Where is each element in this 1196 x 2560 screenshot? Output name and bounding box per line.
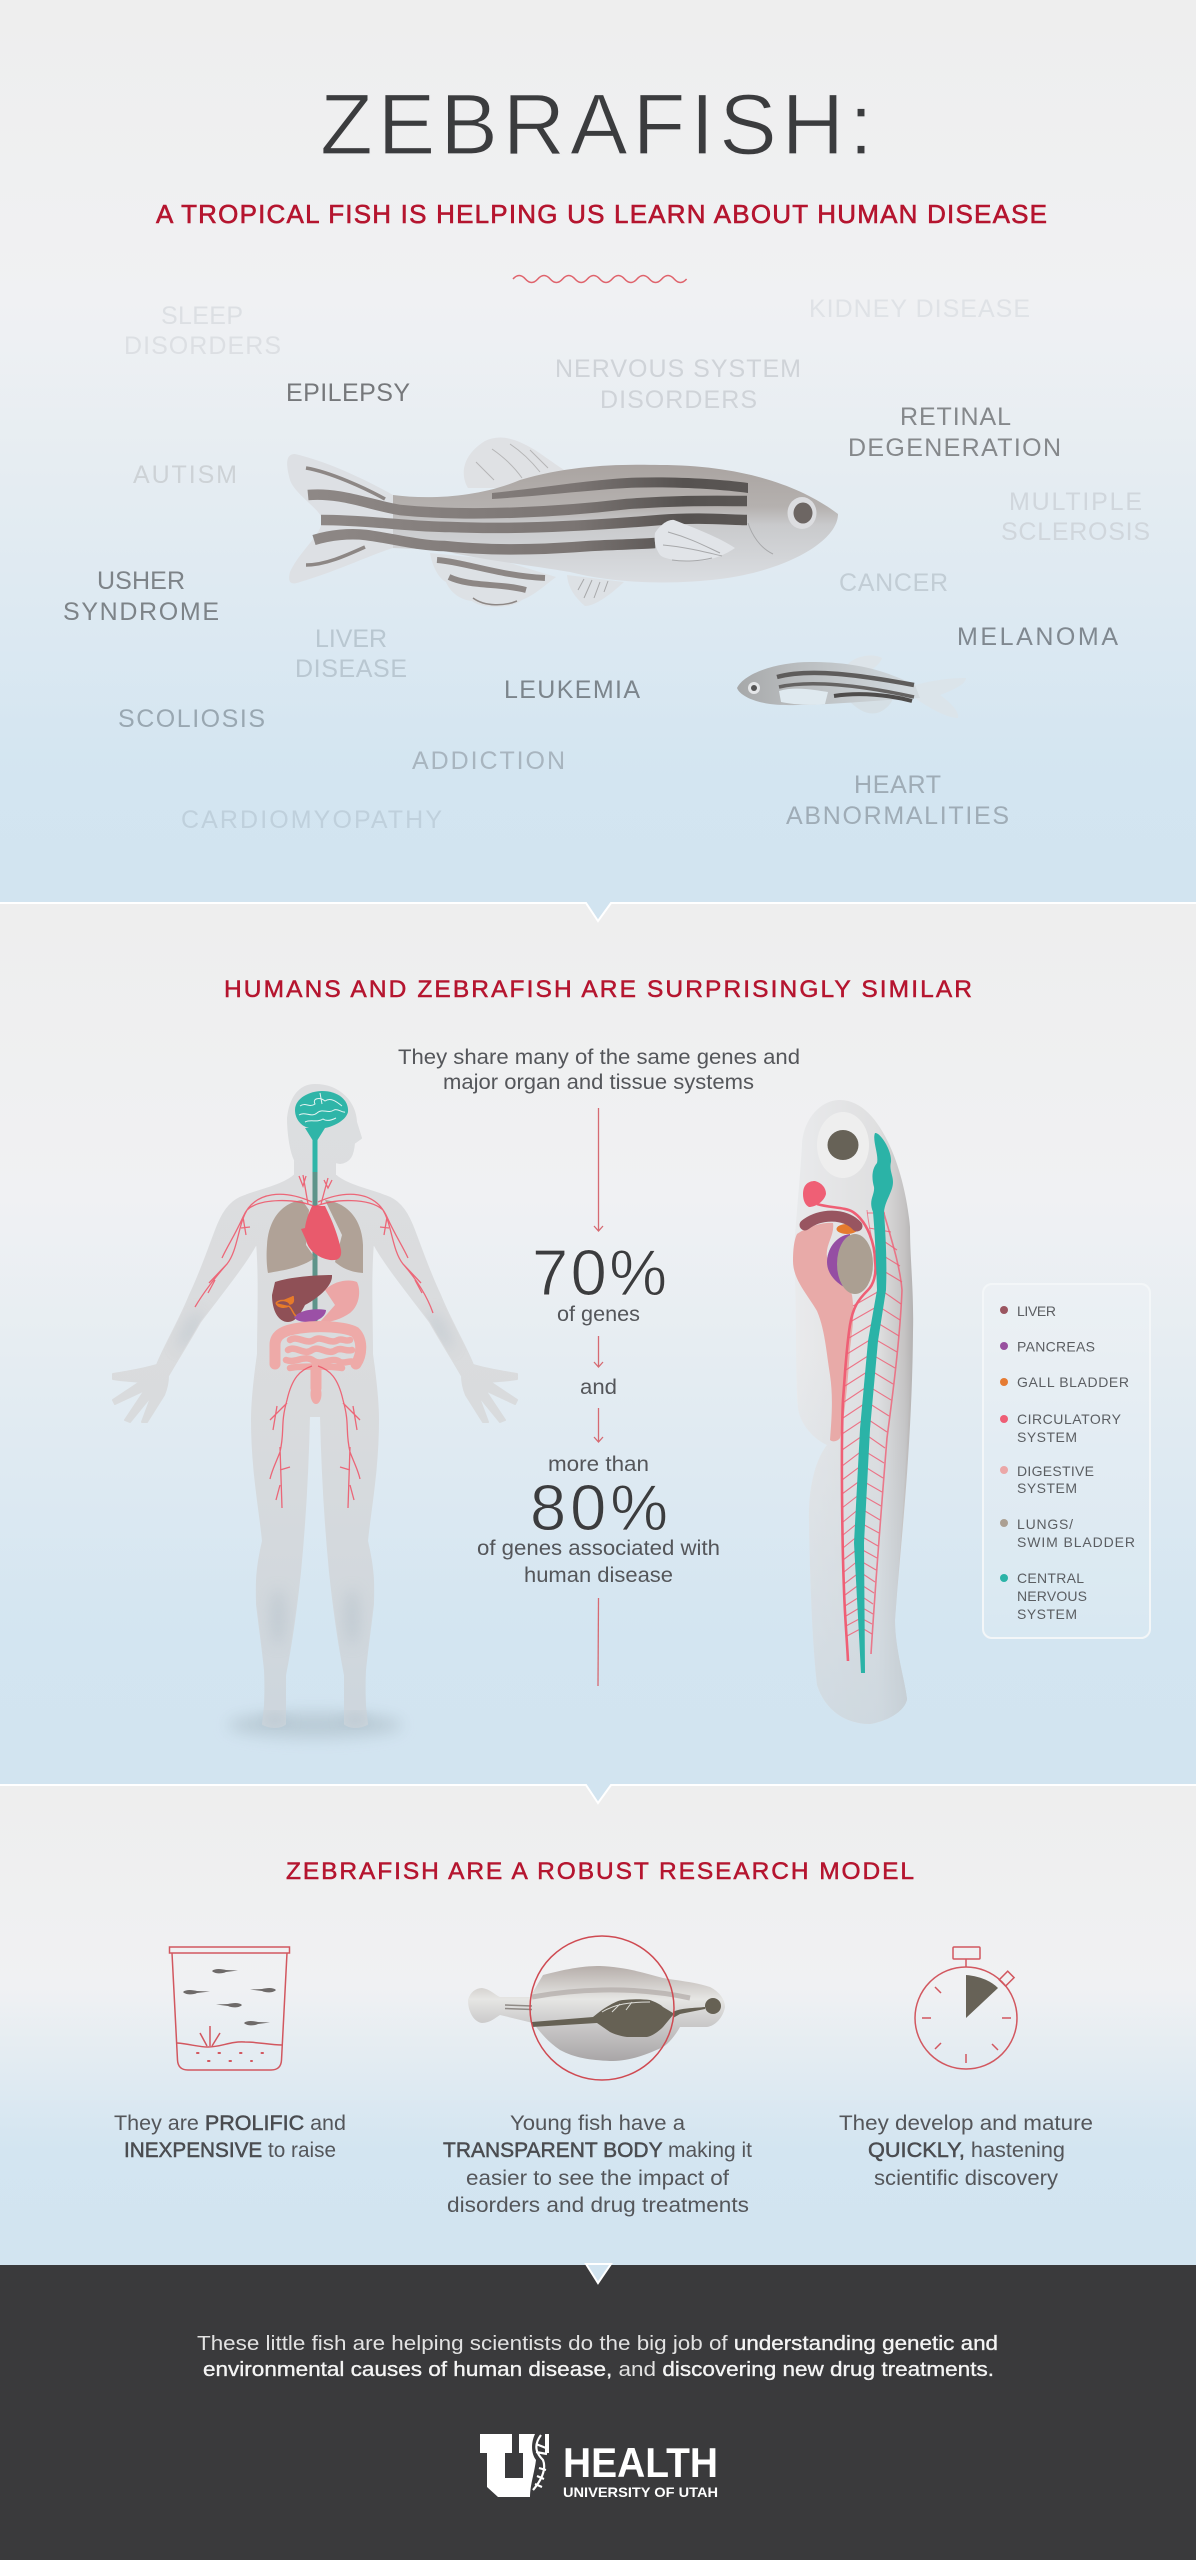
panel: research model: [0, 1785, 1196, 2265]
intro text: They share many of the same genes and: [398, 1046, 800, 1069]
disease label: sleep disorders: [124, 302, 281, 360]
lungs: [267, 1200, 363, 1273]
illustration: adult zebrafish: [287, 438, 838, 607]
disease label: heart abnormalities: HEART: [854, 771, 941, 799]
brain: [295, 1091, 348, 1128]
spine through chest: [312, 1172, 318, 1322]
legend item: liver: LIVER: [1017, 1303, 1056, 1319]
illustration: larval zebrafish anatomy: [793, 1100, 913, 1724]
section heading: ZEBRAFISH ARE A ROBUST RESEARCH MODEL: [286, 1858, 914, 1885]
illustration: human body: [113, 1085, 517, 1738]
disease label: addiction: ADDICTION: [412, 747, 565, 775]
disease label: nervous system disorders: DISORDERS: [600, 386, 757, 414]
legend item: circulatory system: [1000, 1411, 1122, 1445]
disease label: retinal degeneration: [848, 403, 1061, 462]
liver: [272, 1275, 332, 1322]
legend item: liver: [1000, 1303, 1056, 1319]
stat: 70 percent: 70%: [532, 1236, 667, 1309]
stat caption: of genes: [557, 1303, 640, 1326]
legend item: central nervous system: NERVOUS: [1017, 1588, 1087, 1604]
logo: University of Utah Health: UNIVERSITY OF UTAH: [563, 2484, 718, 2500]
heart: [301, 1206, 341, 1260]
stat caption: [477, 1537, 720, 1587]
panel: similarities: [0, 903, 1196, 1786]
intro text: [398, 1046, 800, 1094]
stat: 80 percent: 80%: [530, 1471, 668, 1544]
divider notch: [586, 2264, 611, 2283]
larva swim bladder: [837, 1234, 873, 1294]
text: prolific: [114, 2112, 346, 2162]
disease label: scoliosis: SCOLIOSIS: [118, 705, 265, 733]
legend item: lungs / swim bladder: [1000, 1516, 1135, 1550]
text: quickly: They develop and mature: [839, 2112, 1093, 2135]
larva circulatory system: [803, 1181, 902, 1661]
disease label: usher syndrome: SYNDROME: [63, 598, 219, 626]
larva pancreas: [827, 1234, 850, 1290]
disease label: autism: AUTISM: [133, 461, 237, 489]
text: transparent body: Young fish have a: [510, 2112, 685, 2135]
text: quickly: QUICKLY, hastening: [868, 2139, 1065, 2162]
panel: hero: [0, 0, 1196, 904]
larva gall bladder: [836, 1224, 858, 1234]
wave ornament: [513, 276, 687, 282]
disease label: cancer: CANCER: [839, 569, 948, 597]
legend item: central nervous system: [1000, 1570, 1087, 1622]
panel: footer: [0, 2264, 1196, 2560]
intro text: major organ and tissue systems: [443, 1071, 754, 1094]
disease label: liver disease: [295, 625, 407, 683]
legend item: lungs / swim bladder: LUNGS/: [1017, 1516, 1073, 1532]
disease label: usher syndrome: USHER: [97, 567, 185, 595]
stat caption: human disease: [524, 1564, 673, 1587]
disease label: multiple sclerosis: SCLEROSIS: [1001, 518, 1150, 546]
icon: transparent larva in magnifier: [468, 1936, 725, 2080]
disease label: heart abnormalities: ABNORMALITIES: [786, 802, 1009, 830]
disease label: multiple sclerosis: MULTIPLE: [1009, 488, 1142, 516]
text: transparent body: disorders and drug treatments: [447, 2194, 749, 2217]
connector line: [597, 1598, 600, 1686]
disease label: liver disease: DISEASE: [295, 655, 407, 683]
intestines: [275, 1327, 361, 1404]
legend item: digestive system: [1000, 1463, 1094, 1496]
divider notch: [0, 1785, 1196, 1803]
icon: fish tank: [170, 1947, 290, 2070]
disease label: kidney disease: KIDNEY DISEASE: [809, 295, 1030, 323]
disease label: epilepsy: EPILEPSY: [286, 379, 410, 407]
larva digestive system: [793, 1223, 853, 1441]
disease label: leukemia: LEUKEMIA: [504, 676, 640, 704]
legend item: circulatory system: CIRCULATORY: [1017, 1411, 1122, 1427]
disease label: usher syndrome: [63, 567, 219, 626]
larva liver: [805, 1216, 857, 1226]
stat caption: of genes associated with: [477, 1537, 720, 1560]
closing statement: environmental causes of human disease, and discovering new drug treatments.: [203, 2358, 994, 2381]
legend item: lungs / swim bladder: SWIM BLADDER: [1017, 1534, 1135, 1550]
legend item: circulatory system: SYSTEM: [1017, 1429, 1077, 1445]
shading on limbs: [174, 1308, 456, 1645]
text: transparent body: easier to see the impact of: [466, 2167, 729, 2190]
larva central nervous system: [854, 1133, 893, 1673]
gall bladder: [276, 1296, 296, 1316]
vessels: [195, 1175, 433, 1508]
illustration: young zebrafish: [737, 656, 966, 718]
text: quickly: [839, 2112, 1093, 2190]
feet shadow: [261, 1715, 369, 1725]
divider notch: [0, 903, 1196, 921]
legend item: digestive system: DIGESTIVE: [1017, 1463, 1094, 1479]
legend item: central nervous system: SYSTEM: [1017, 1606, 1077, 1622]
connector word: and: [580, 1376, 617, 1399]
text: transparent body: [443, 2112, 752, 2217]
disease label: retinal degeneration: DEGENERATION: [848, 434, 1061, 462]
disease label: cardiomyopathy: CARDIOMYOPATHY: [181, 806, 442, 834]
stat lead-in: more than: [548, 1453, 649, 1476]
icon: stopwatch: [915, 1947, 1017, 2069]
arrow: [594, 1108, 603, 1231]
text: transparent body: TRANSPARENT BODY making it: [443, 2139, 752, 2162]
closing statement: [197, 2332, 998, 2381]
logo: University of Utah Health: HEALTH: [563, 2439, 718, 2486]
legend item: central nervous system: CENTRAL: [1017, 1570, 1084, 1586]
legend: [983, 1284, 1150, 1638]
disease label: sleep disorders: DISORDERS: [124, 332, 281, 360]
legend item: pancreas: PANCREAS: [1017, 1338, 1095, 1354]
text: quickly: scientific discovery: [874, 2167, 1059, 2190]
title: ZEBRAFISH:: [320, 77, 873, 173]
disease label: multiple sclerosis: [1001, 488, 1150, 546]
arrow: [594, 1336, 603, 1367]
subtitle: A TROPICAL FISH IS HELPING US LEARN ABOUT HUMAN DISEASE: [156, 199, 1047, 229]
section heading: HUMANS AND ZEBRAFISH ARE SURPRISINGLY SIMILAR: [224, 976, 972, 1003]
disease label: sleep disorders: SLEEP: [161, 302, 243, 330]
disease label: liver disease: LIVER: [315, 625, 387, 653]
spinal cord: [305, 1128, 325, 1322]
legend item: digestive system: SYSTEM: [1017, 1480, 1077, 1496]
text: prolific: INEXPENSIVE to raise: [124, 2139, 336, 2162]
legend item: gall bladder: GALL BLADDER: [1017, 1374, 1129, 1390]
disease label: heart abnormalities: [786, 771, 1009, 830]
closing statement: These little fish are helping scientists do the big job of understanding genetic and: [197, 2332, 998, 2355]
disease label: nervous system disorders: NERVOUS SYSTEM: [555, 355, 801, 383]
disease label: retinal degeneration: RETINAL: [900, 403, 1011, 431]
disease label: nervous system disorders: [555, 355, 801, 414]
arrow: [594, 1408, 603, 1442]
text: prolific: They are PROLIFIC and: [114, 2112, 346, 2135]
stomach: [320, 1281, 359, 1322]
eye: [817, 1112, 869, 1178]
disease label: melanoma: MELANOMA: [957, 623, 1118, 651]
logo: University of Utah Health: [480, 2434, 718, 2500]
pancreas: [294, 1309, 326, 1322]
